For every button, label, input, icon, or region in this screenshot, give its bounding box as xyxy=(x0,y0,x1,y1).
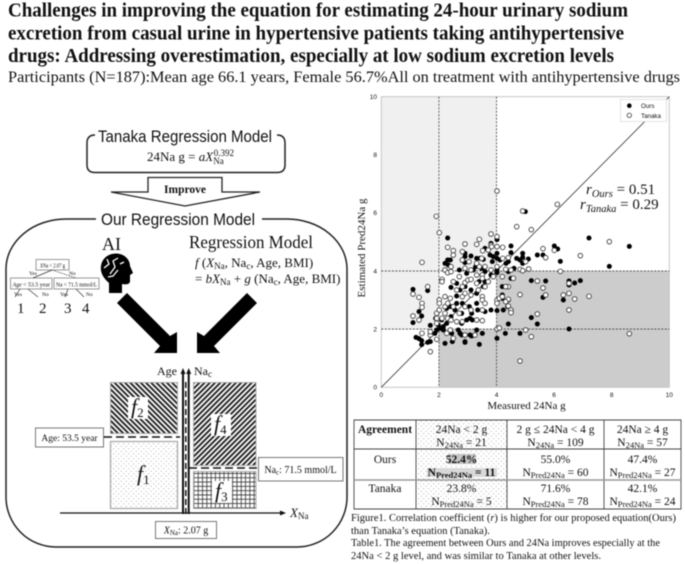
table: agreement: 42.1% xyxy=(628,483,658,495)
region f1 xyxy=(110,442,178,508)
decision tree: Yes xyxy=(60,292,68,298)
panel: Tanaka regression model xyxy=(87,127,285,172)
table: agreement: N xyxy=(431,496,440,508)
regression model heading: Regression Model xyxy=(189,232,313,252)
x axis label: Measured 24Na g xyxy=(487,400,566,412)
axes: Na xyxy=(194,364,208,378)
title xyxy=(8,0,628,67)
table: agreement: 23.8% xyxy=(447,483,477,495)
regression formula: c xyxy=(274,277,278,287)
table: agreement: N xyxy=(428,467,436,479)
axis tick labels: 8 xyxy=(373,152,377,159)
threshold: sodium concentration: c xyxy=(276,468,279,476)
axis tick labels: 2 xyxy=(373,326,377,334)
table: agreement: 24Na xyxy=(536,440,554,450)
correlation coefficients: r xyxy=(580,197,586,213)
legend: Ours xyxy=(641,103,654,110)
threshold: sodium concentration xyxy=(189,458,343,481)
region f3 xyxy=(194,472,256,508)
regression formula: g (Na xyxy=(244,271,274,286)
regression formula: c xyxy=(246,261,250,271)
threshold: XNa xyxy=(156,522,216,538)
caption: Figure1. Correlation coefficient (r) is higher for our proposed equation(Ours) xyxy=(351,513,676,524)
decision tree: Na < 71.5 mmol/L xyxy=(56,281,97,288)
table: agreement: = 109 xyxy=(554,437,584,449)
table: agreement: 24Na < 2 g xyxy=(436,424,488,436)
axes: c xyxy=(208,369,212,379)
axes: Na xyxy=(298,511,308,521)
subtitle: participants: Participants (N=187):Mean age 66.1 years, Female 56.7%All on treatment with antihypertensive drugs xyxy=(8,69,680,86)
axis tick labels: 2 xyxy=(437,392,441,399)
threshold: age xyxy=(36,428,180,447)
decision tree: Age < 53.5 year xyxy=(12,281,51,288)
region f3: 3 xyxy=(221,489,228,504)
table: agreement: N xyxy=(436,437,445,449)
regression formula: , Age, BMI) xyxy=(278,271,340,286)
table: agreement: N xyxy=(527,437,536,449)
axes: X xyxy=(290,505,298,520)
table: agreement: Pred24Na xyxy=(618,470,652,480)
highlight: ours low sodium xyxy=(427,454,497,477)
table: agreement: Pred24Na xyxy=(436,470,473,480)
threshold: sodium concentration: Na xyxy=(264,465,276,476)
table: agreement: 71.6% xyxy=(541,483,571,495)
scatter chart xyxy=(356,94,673,412)
region f4 xyxy=(194,382,256,466)
axes xyxy=(60,364,308,521)
table: agreement: = 5 xyxy=(474,496,492,508)
table: agreement: = 27 xyxy=(652,467,676,479)
panel: our regression model: Our Regression Model xyxy=(101,210,255,229)
threshold: sodium concentration: : 71.5 mmol/L xyxy=(279,465,337,476)
table: agreement: 2 g ≤ 24Na < 4 g xyxy=(517,424,595,436)
regression formula: + xyxy=(231,271,244,286)
decision tree: No xyxy=(86,292,93,298)
table: agreement: N xyxy=(609,467,618,479)
table: agreement: N xyxy=(609,496,618,508)
regression formula xyxy=(195,255,340,287)
threshold: XNa: X xyxy=(163,526,171,536)
table: agreement: Pred24Na xyxy=(531,499,565,509)
table: agreement: Pred24Na xyxy=(618,499,652,509)
region f2: 2 xyxy=(137,405,144,420)
table: agreement: N xyxy=(522,467,531,479)
axis tick labels xyxy=(370,94,673,399)
axis tick labels: 4 xyxy=(495,392,499,399)
correlation coefficients: = 0.29 xyxy=(616,197,659,213)
region f3: f xyxy=(215,478,221,503)
decision tree: 4 xyxy=(82,301,90,317)
decision tree: XNa < 2.07 g xyxy=(39,262,66,269)
axis tick labels: 6 xyxy=(552,392,556,399)
shaded zones xyxy=(381,97,496,329)
table: agreement: N xyxy=(617,437,626,449)
correlation coefficients: Tanaka xyxy=(586,204,616,215)
axis tick labels: 0 xyxy=(373,384,377,392)
axes: Age xyxy=(157,364,177,378)
table: agreement: 24Na ≥ 4 g xyxy=(617,424,668,436)
regression formula: f (X xyxy=(195,255,214,270)
regression formula: Na xyxy=(214,261,225,271)
AI label: AI xyxy=(102,234,121,254)
points: Tanaka xyxy=(411,189,632,363)
arrow: AI to partition xyxy=(117,293,177,353)
table: agreement: N xyxy=(522,496,531,508)
table: agreement: 55.0% xyxy=(541,454,571,466)
table: agreement: 47.4% xyxy=(628,454,658,466)
region f1: f xyxy=(137,461,143,486)
panel: Tanaka regression model: Tanaka Regression Model xyxy=(98,127,272,146)
decision tree: Yes xyxy=(14,292,22,298)
arrow: improve: Improve xyxy=(164,184,206,196)
points: Ours xyxy=(410,209,632,347)
table: agreement: = 24 xyxy=(652,496,676,508)
y axis label: Estimated Pred24Na g xyxy=(356,198,368,297)
arrow: improve xyxy=(111,178,260,206)
legend xyxy=(620,100,666,122)
axis tick labels: 6 xyxy=(373,210,377,217)
region f1: 1 xyxy=(143,472,150,487)
caption: 24Na < 2 g level, and was similar to Tanaka at other levels. xyxy=(351,551,601,562)
decision tree: 2 xyxy=(39,301,46,317)
table: agreement: Tanaka xyxy=(368,483,402,495)
axis tick labels: 0 xyxy=(379,392,383,399)
decision tree: No xyxy=(69,271,76,277)
panel: Tanaka regression model: 0.392 xyxy=(214,148,234,158)
table: agreement: = 11 xyxy=(472,467,496,479)
axis tick labels: 4 xyxy=(373,268,377,276)
axis tick labels: 10 xyxy=(370,94,377,101)
title: Challenges in improving the equation for estimating 24-hour urinary sodium xyxy=(8,0,628,22)
panel: Tanaka regression model: Na xyxy=(213,156,224,166)
table: agreement: Agreement xyxy=(358,424,412,436)
decision tree: 1 xyxy=(17,301,24,317)
table: agreement: Pred24Na xyxy=(440,499,474,509)
regression formula: Na xyxy=(220,277,231,287)
threshold: age: Age: 53.5 year xyxy=(41,434,98,444)
decision tree: No xyxy=(42,292,49,298)
table: agreement xyxy=(354,420,681,509)
decision tree xyxy=(10,260,99,317)
caption: Table1. The agreement between Ours and 24Na improves especially at the xyxy=(351,538,660,549)
title: drugs: Addressing overestimation, especially at low sodium excretion levels xyxy=(8,46,614,67)
correlation coefficients: = 0.51 xyxy=(613,182,655,198)
table: agreement: = 78 xyxy=(565,496,589,508)
table: agreement: 52.4% xyxy=(446,454,477,466)
axis tick labels: 10 xyxy=(666,392,673,399)
regression formula: , Age, BMI) xyxy=(250,255,313,270)
correlation coefficients: Ours xyxy=(592,189,613,200)
icon: AI head xyxy=(101,253,133,293)
table: agreement: = 21 xyxy=(463,437,487,449)
decision tree: Yes xyxy=(29,271,37,277)
table: agreement: = 60 xyxy=(565,467,589,479)
correlation coefficients: r xyxy=(586,182,592,198)
decision tree: 3 xyxy=(64,301,72,317)
caption xyxy=(351,513,676,562)
region f2: f xyxy=(131,394,137,419)
table: agreement: Pred24Na xyxy=(531,470,565,480)
regression formula: = bX xyxy=(195,271,220,286)
panel: our regression model xyxy=(6,210,347,547)
region f4: f xyxy=(214,411,220,436)
threshold: XNa: : 2.07 g xyxy=(178,526,208,536)
arrow: regression to partition xyxy=(197,293,257,353)
table: agreement: 24Na xyxy=(626,440,644,450)
regression formula: , Na xyxy=(225,255,247,270)
table: agreement: Ours xyxy=(374,454,397,466)
legend: Tanaka xyxy=(641,113,662,120)
axis tick labels: 8 xyxy=(610,392,614,399)
table: agreement: = 57 xyxy=(644,437,668,449)
caption: than Tanaka’s equation (Tanaka). xyxy=(351,526,490,537)
table: agreement: 24Na xyxy=(445,440,463,450)
region f4: 4 xyxy=(220,422,227,437)
region f2 xyxy=(110,382,178,434)
panel: Tanaka regression model: 24Na g = aX xyxy=(147,149,213,164)
threshold: XNa: Na xyxy=(170,529,179,537)
shaded underestimate zones xyxy=(439,271,669,387)
title: excretion from casual urine in hypertensive patients taking antihypertensive xyxy=(8,24,624,44)
correlation coefficients xyxy=(580,182,659,215)
